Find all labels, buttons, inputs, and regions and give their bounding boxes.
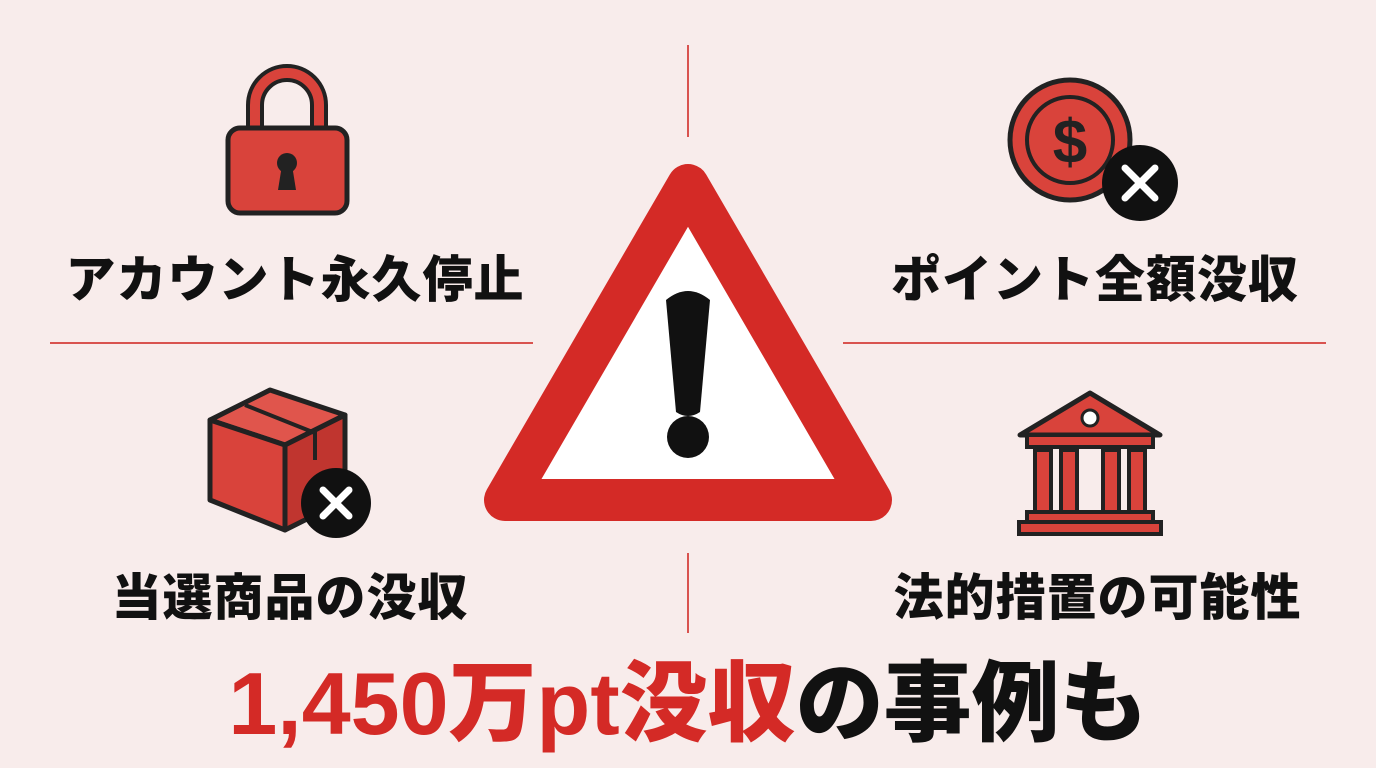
divider lines bbox=[687, 45, 689, 137]
label: legal: 法的措置の可能性 bbox=[894, 570, 1302, 626]
exclamation bbox=[666, 291, 710, 458]
icon: bank bbox=[1017, 390, 1163, 536]
icon: coin with x bbox=[1008, 78, 1178, 221]
icon: box with x bbox=[208, 388, 371, 538]
icon: lock bbox=[226, 64, 350, 216]
bottom headline: 1,450万pt没収の事例も bbox=[228, 654, 1148, 753]
warning triangle bbox=[484, 164, 892, 521]
icon: coin with x: $ bbox=[1053, 108, 1087, 177]
label: points: ポイント全額没収 bbox=[891, 252, 1299, 308]
label: prizes: 当選商品の没収 bbox=[112, 570, 468, 626]
label: account: アカウント永久停止 bbox=[66, 252, 524, 308]
